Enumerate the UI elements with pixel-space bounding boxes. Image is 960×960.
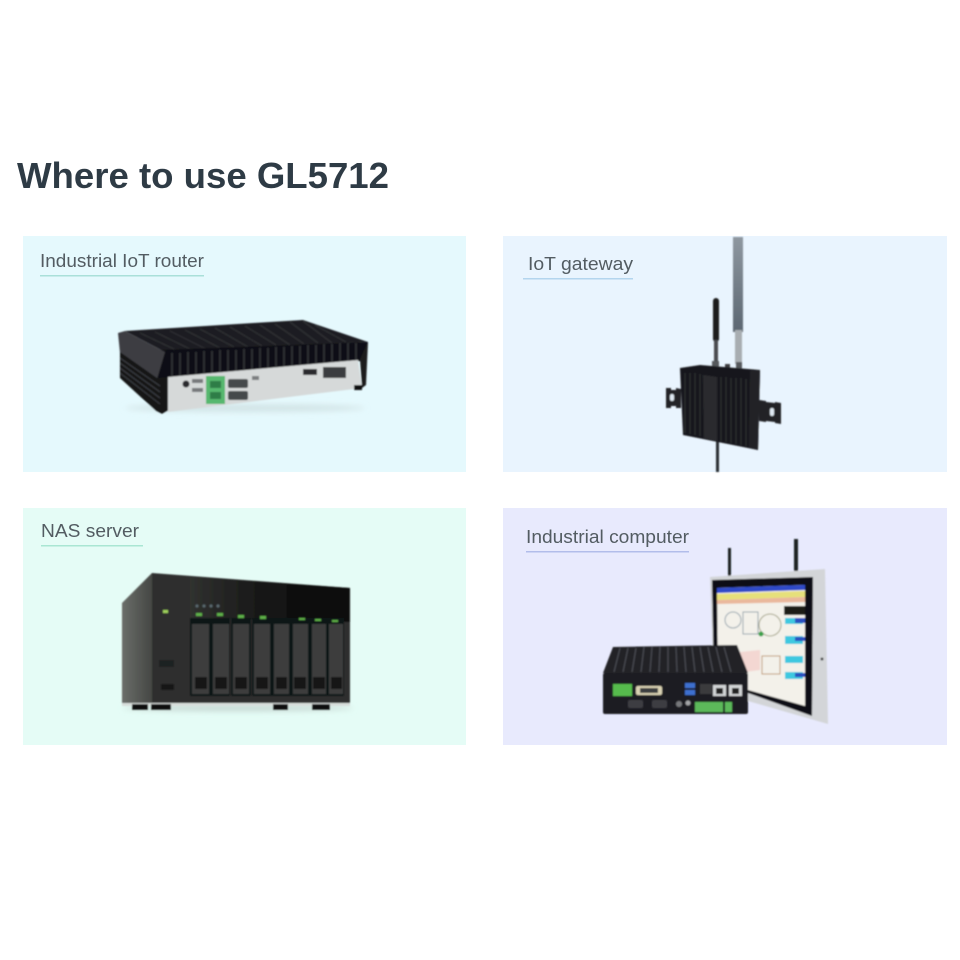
image: fanless router box [118,320,368,414]
label: Industrial IoT router: Industrial IoT router [40,251,204,271]
panel: Industrial computer [503,508,947,745]
label: NAS server: NAS server [41,521,139,541]
label: IoT gateway [523,254,633,280]
label: IoT gateway: IoT gateway [528,254,633,274]
label: Industrial computer: Industrial computer [526,527,689,547]
panel: Industrial IoT router [23,236,466,472]
title: Where to use GL5712 [17,155,389,196]
image: panel PC and fanless box [603,539,828,724]
image: NAS with eight drive bays [122,573,353,711]
panel: IoT gateway [503,236,947,472]
panel: NAS server [23,508,466,745]
image: gateway with antennas [666,237,781,472]
